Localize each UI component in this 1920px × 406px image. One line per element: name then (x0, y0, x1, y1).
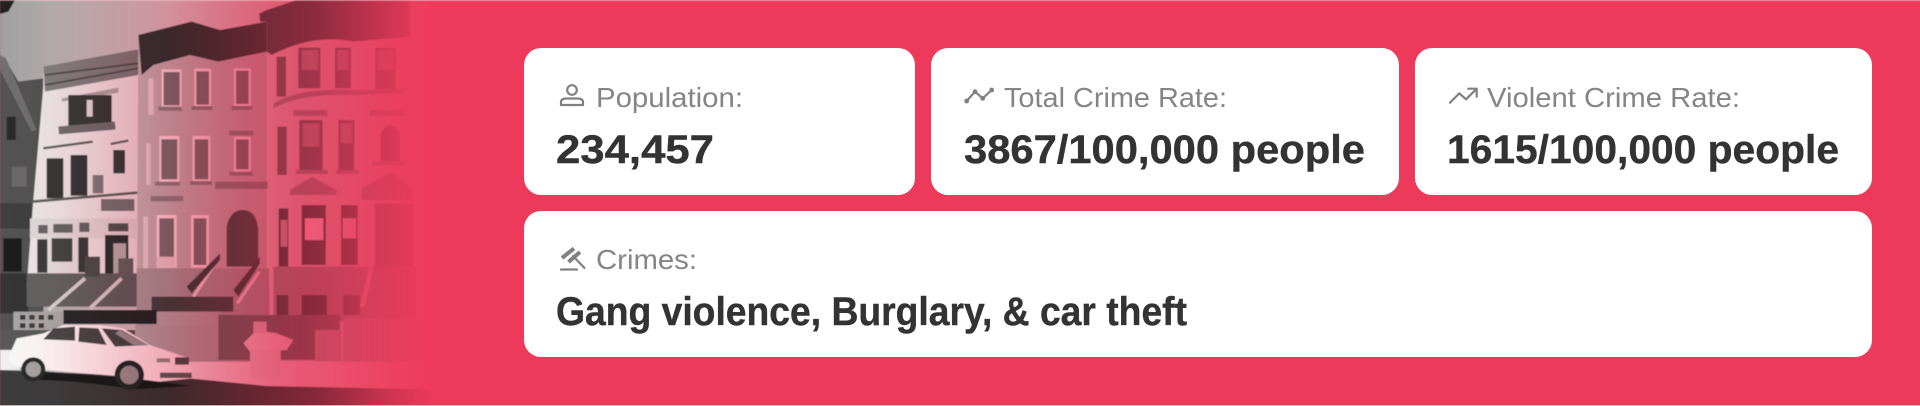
value: population: 234,457 (556, 128, 714, 172)
bay building (267, 2, 413, 367)
label: violent crime rate: Violent Crime Rate: (1487, 82, 1740, 113)
label: crimes: Crimes: (596, 244, 697, 275)
value: crimes: Gang violence, Burglary, & car theft (556, 290, 1187, 334)
value: total crime rate: 3867/100,000 people (964, 128, 1365, 172)
sidewalk and road (0, 350, 433, 387)
icon: trending up arrow (1450, 89, 1477, 103)
planter (243, 330, 293, 352)
label: total crime rate: Total Crime Rate: (1004, 82, 1227, 113)
panel: population (524, 48, 915, 195)
label: population: Population: (596, 82, 743, 113)
value: violent crime rate: 1615/100,000 people (1447, 128, 1839, 172)
icon: gavel (561, 248, 584, 270)
car (8, 325, 193, 383)
photo: brownstone street with car, red gradient fade (0, 0, 440, 406)
panel: violent crime rate (1415, 48, 1872, 195)
panel: total crime rate (931, 48, 1399, 195)
stone building (27, 49, 138, 287)
icon: trend line (964, 88, 994, 103)
fence and low wall (63, 310, 157, 324)
mid brownstone (137, 22, 267, 363)
icon: person (561, 85, 583, 105)
left dark building (0, 55, 43, 333)
panel: crimes (524, 211, 1872, 357)
